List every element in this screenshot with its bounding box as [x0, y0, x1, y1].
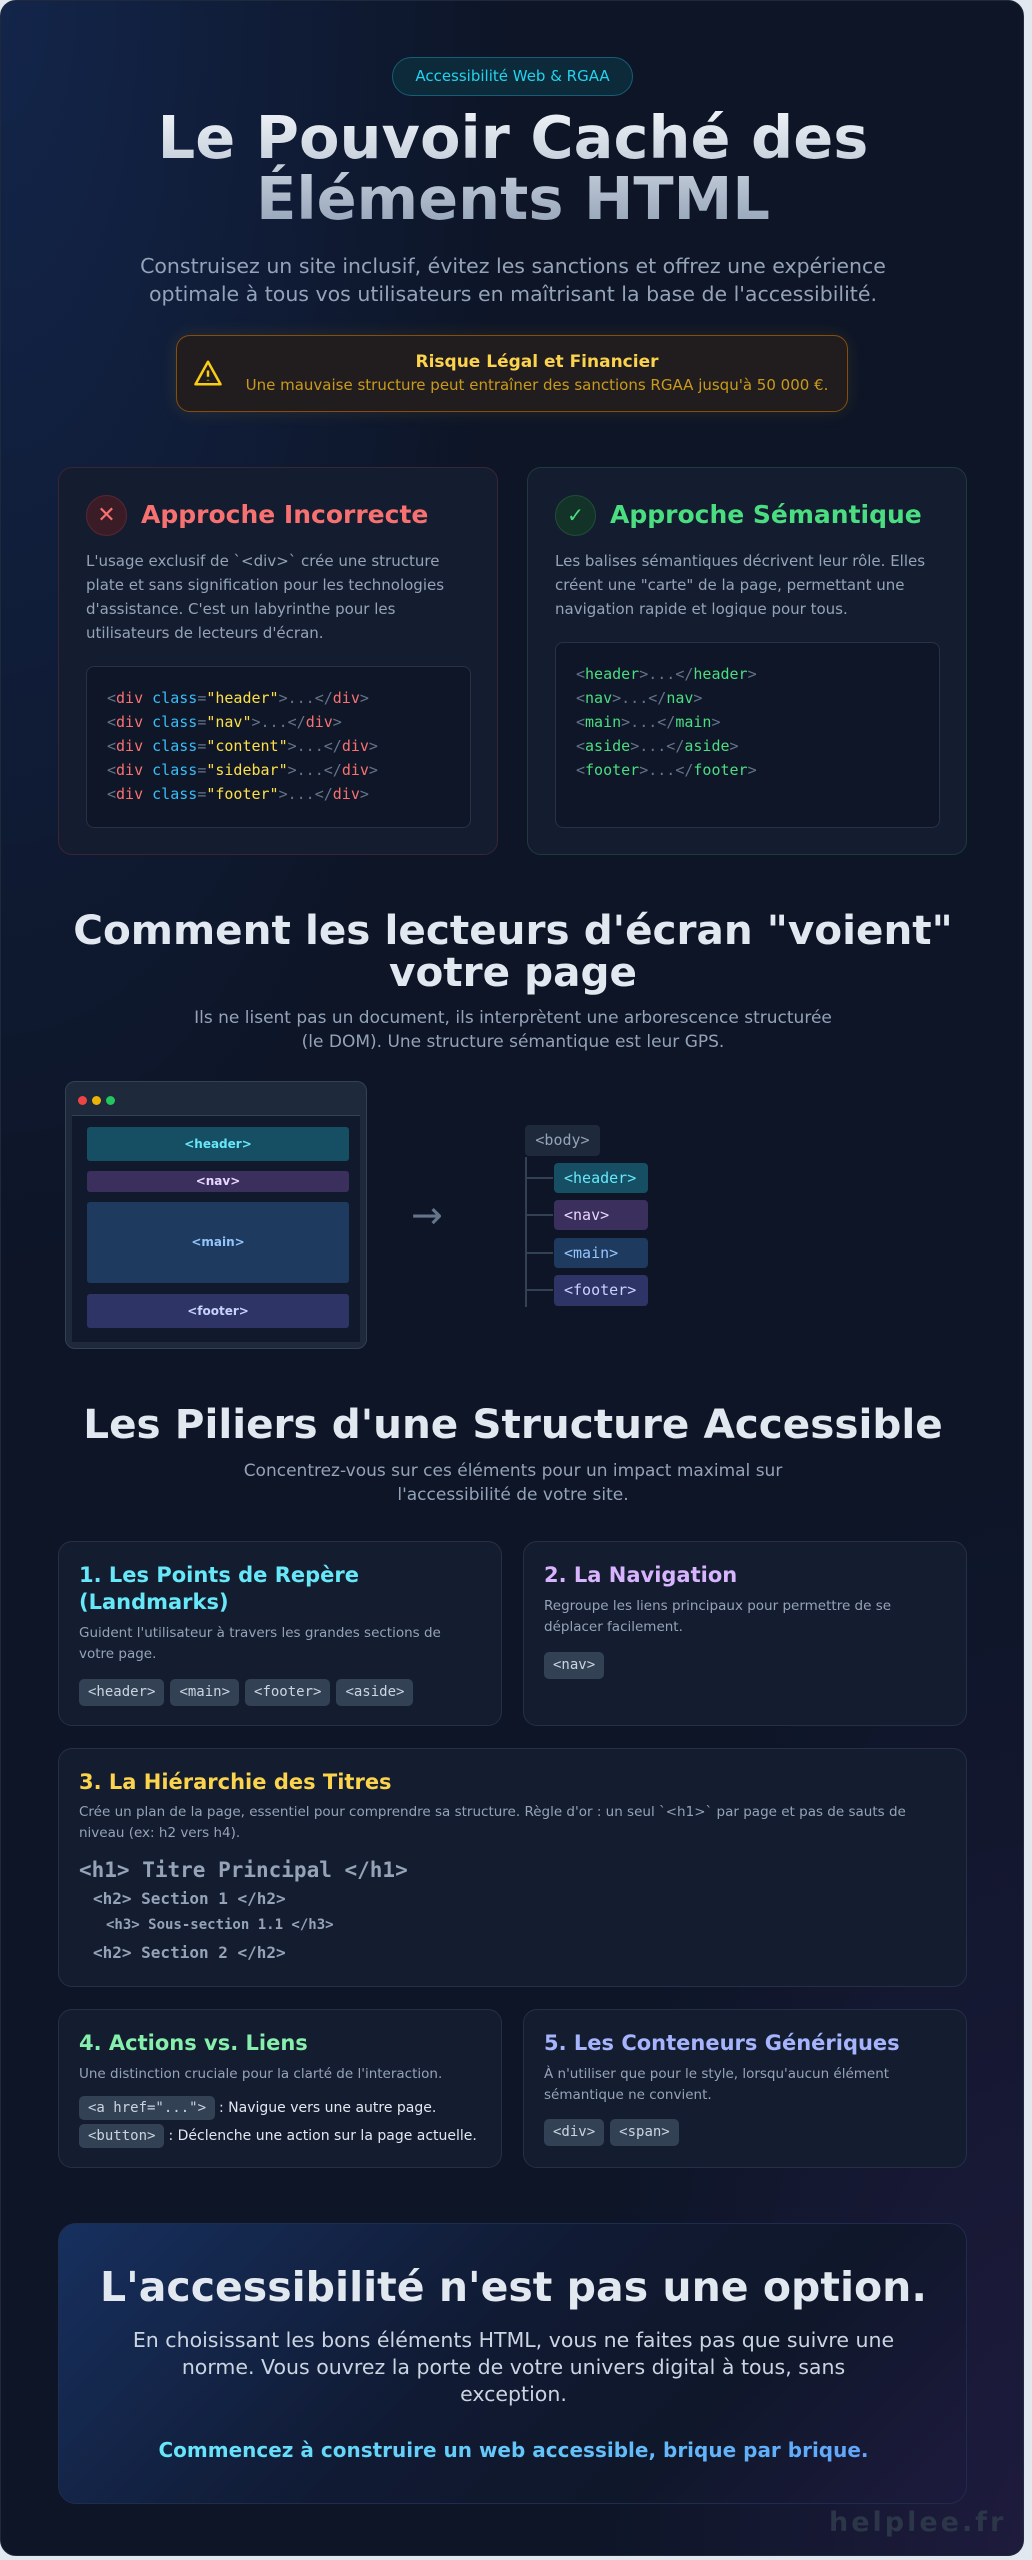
code block [555, 642, 940, 828]
panel: semantic approach [527, 467, 967, 855]
card 5: generic containers: <span> [619, 2124, 670, 2140]
block: nav [87, 1171, 349, 1192]
tags: <main> [179, 1684, 230, 1700]
card 1: landmarks: Guident l'utilisateur à travers les grandes sections de votre page. [79, 1625, 441, 1662]
card 5: generic containers: 5. Les Conteneurs Génériques [544, 2031, 900, 2055]
DOM tree: <body> [535, 1131, 590, 1149]
CTA panel: norme. Vous ouvrez la porte de votre univers digital à tous, sans [182, 2355, 845, 2379]
node: footer: <footer> [564, 1281, 636, 1299]
title: Le Pouvoir Caché des [158, 103, 868, 172]
CTA panel: exception. [460, 2382, 567, 2406]
section subtitle [244, 1461, 782, 1505]
card 5: generic containers: À n'utiliser que pour le style, lorsqu'aucun élément sémantique ne convient. [544, 2066, 889, 2103]
heading tree code: <h1> Titre Principal </h1> [79, 1858, 408, 1882]
card 1: landmarks: (Landmarks) [79, 1590, 229, 1614]
icon: warning [194, 360, 222, 386]
CTA panel: En choisissant les bons éléments HTML, vous ne faites pas que suivre une [133, 2328, 894, 2352]
icon: check [555, 495, 596, 536]
section heading: screen readers: Comment les lecteurs d'écran "voient" [73, 906, 953, 954]
node: footer [554, 1275, 648, 1306]
heading tree code [79, 1858, 408, 1962]
title [1, 107, 1025, 229]
window dots [78, 1096, 115, 1105]
node: header [554, 1163, 648, 1193]
card 4: actions vs links: <a href="..."> [88, 2100, 206, 2116]
card 2: navigation: <nav> [553, 1657, 595, 1673]
heading tree code: <h3> Sous-section 1.1 </h3> [106, 1917, 334, 1933]
section heading: screen readers [73, 906, 953, 996]
CTA panel [58, 2223, 967, 2504]
subtitle [140, 254, 886, 306]
card 3: headings hierarchy: Crée un plan de la page, essentiel pour comprendre sa structure. Règle d'or : un seul `<h1>` par page et pas de sauts de niveau (ex: h2 vers h4). [79, 1804, 906, 1841]
block: header: <header> [184, 1137, 252, 1151]
warning text [246, 352, 828, 394]
arrow: → [411, 1193, 443, 1237]
icon: cross: ✕ [97, 503, 116, 528]
card 2: navigation [523, 1541, 967, 1726]
block: header [87, 1127, 349, 1161]
warning text: Risque Légal et Financier [415, 352, 658, 372]
code block: <div class="header">...</div> <div class="nav">...</div> <div class="content">...</div> <div class="sidebar">...</div> <div class="footer">...</div> [107, 689, 378, 803]
section subtitle: Concentrez-vous sur ces éléments pour un impact maximal sur [244, 1461, 782, 1481]
badge [392, 57, 633, 96]
card 1: landmarks [58, 1541, 502, 1726]
node: nav [554, 1200, 648, 1230]
block: main: <main> [191, 1235, 245, 1249]
CTA panel: Commencez à construire un web accessible, brique par brique. [158, 2438, 869, 2462]
heading tree code: <h2> Section 2 </h2> [93, 1943, 286, 1962]
section subtitle: (le DOM). Une structure sémantique est leur GPS. [302, 1032, 724, 1052]
node: header: <header> [564, 1169, 636, 1187]
panel: incorrect approach [58, 467, 498, 855]
card 4: actions vs links: Une distinction cruciale pour la clarté de l'interaction. [79, 2066, 442, 2082]
warning text: Une mauvaise structure peut entraîner des sanctions RGAA jusqu'à 50 000 €. [246, 376, 828, 394]
heading tree code: <h2> Section 1 </h2> [93, 1889, 286, 1908]
subtitle: optimale à tous vos utilisateurs en maîtrisant la base de l'accessibilité. [149, 282, 877, 306]
section subtitle: l'accessibilité de votre site. [397, 1485, 629, 1505]
warning callout [176, 335, 848, 412]
text: L'usage exclusif de `<div>` crée une structure plate et sans signification pour les technologies d'assistance. C'est un labyrinthe pour les utilisateurs de lecteurs d'écran. [86, 552, 444, 642]
watermark: helplee.fr [829, 2507, 1006, 2538]
tags: <header> [88, 1684, 155, 1700]
node: main [554, 1238, 648, 1268]
card 3: headings hierarchy: 3. La Hiérarchie des Titres [79, 1770, 392, 1794]
section heading: pillars: Les Piliers d'une Structure Accessible [83, 1400, 943, 1448]
card 3: headings hierarchy [58, 1748, 967, 1987]
block: main [87, 1202, 349, 1283]
block: nav: <nav> [196, 1174, 240, 1188]
tags: <footer> [254, 1684, 321, 1700]
CTA panel: L'accessibilité n'est pas une option. [100, 2263, 927, 2311]
node: main: <main> [564, 1244, 618, 1262]
browser mockup [65, 1081, 367, 1349]
card 4: actions vs links: 4. Actions vs. Liens [79, 2031, 308, 2055]
card 5: generic containers: <div> [553, 2124, 595, 2140]
block: footer: <footer> [187, 1304, 249, 1318]
code block: <header>...</header> <nav>...</nav> <main>...</main> <aside>...</aside> <footer>...</footer> [576, 665, 757, 779]
tags: <aside> [345, 1684, 404, 1700]
card 4: actions vs links: : Déclenche une action sur la page actuelle. [168, 2128, 477, 2144]
card 4: actions vs links: <button> [88, 2128, 155, 2144]
card 2: navigation: Regroupe les liens principaux pour permettre de se déplacer facilement. [544, 1598, 891, 1635]
badge: Accessibilité Web & RGAA [415, 67, 610, 85]
section heading: screen readers: votre page [389, 948, 637, 996]
block: footer [87, 1294, 349, 1328]
heading: Approche Incorrecte [141, 500, 428, 529]
card 4: actions vs links [58, 2009, 502, 2168]
card 2: navigation: 2. La Navigation [544, 1563, 737, 1587]
section subtitle: Ils ne lisent pas un document, ils interprètent une arborescence structurée [194, 1008, 832, 1028]
card 4: actions vs links: : Navigue vers une autre page. [219, 2100, 436, 2116]
DOM tree [525, 1125, 648, 1307]
icon: cross [86, 495, 127, 536]
subtitle: Construisez un site inclusif, évitez les sanctions et offrez une expérience [140, 254, 886, 278]
node: nav: <nav> [564, 1206, 609, 1224]
heading: Approche Sémantique [610, 500, 922, 529]
card 1: landmarks: 1. Les Points de Repère [79, 1563, 359, 1587]
card 5: generic containers [523, 2009, 967, 2168]
text: Les balises sémantiques décrivent leur rôle. Elles créent une "carte" de la page, permettant une navigation rapide et logique pour tous. [555, 552, 925, 618]
title: Éléments HTML [256, 164, 770, 233]
section subtitle [194, 1008, 832, 1052]
tags [79, 1679, 413, 1706]
icon: check: ✓ [567, 503, 584, 527]
code block [86, 666, 471, 828]
